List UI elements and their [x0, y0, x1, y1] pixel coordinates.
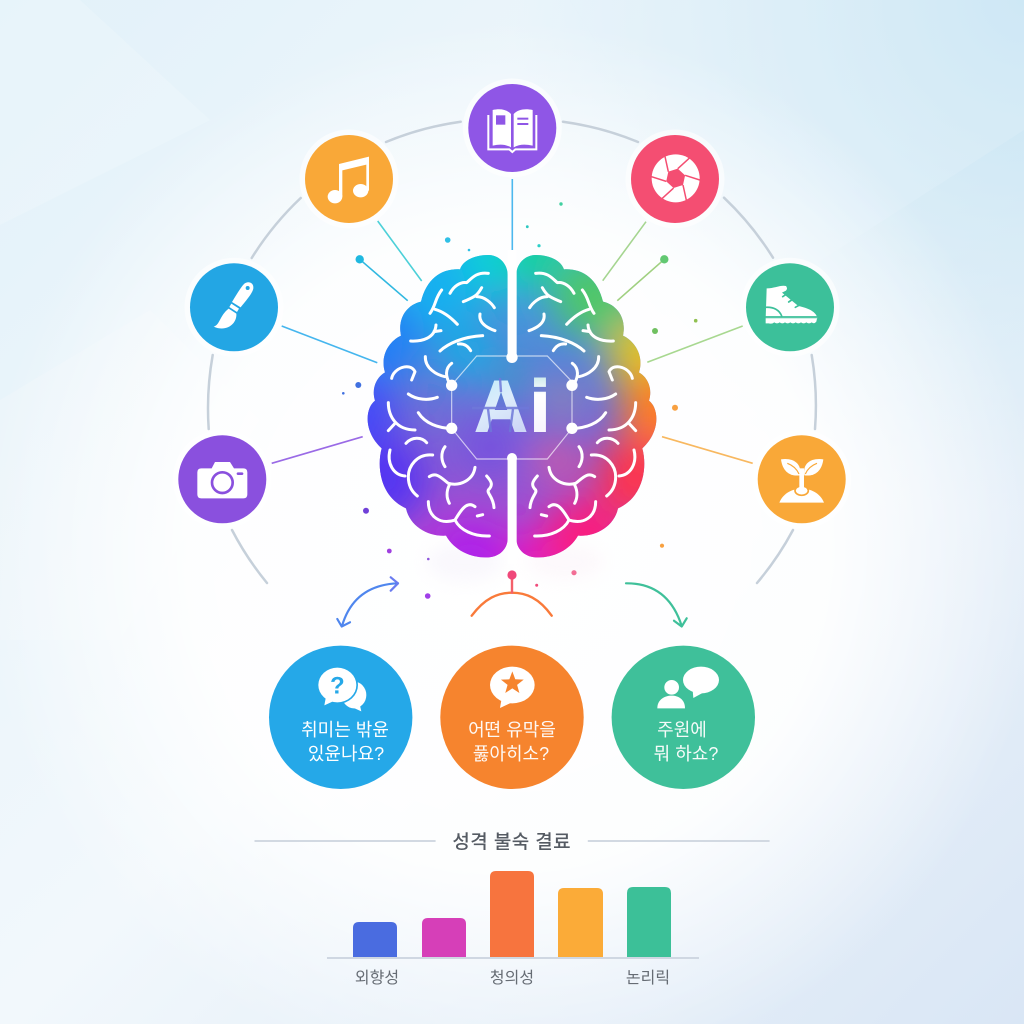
axis labels: 청의성 [490, 969, 534, 987]
icon: question speech bubbles [317, 666, 366, 711]
bar chart [327, 871, 699, 987]
brain illustration [368, 250, 656, 558]
icon: camera [173, 430, 272, 529]
connector lines from icons to brain [272, 179, 753, 463]
chip nodes [446, 352, 578, 463]
icon: person with speech bubble [657, 667, 719, 708]
question text [301, 720, 389, 764]
floating particles [342, 202, 698, 599]
question text: 뭐 하쇼? [654, 744, 718, 764]
right hemisphere folds [529, 273, 636, 536]
icon: question speech bubbles: ? [330, 673, 345, 700]
question card: weekend [612, 646, 755, 789]
icon: star speech bubble [490, 667, 535, 708]
arrow: green curve [626, 583, 687, 626]
Ai label: A [474, 367, 528, 447]
Ai label [472, 367, 550, 447]
central chip octagon [452, 356, 572, 459]
icon: open book [463, 78, 562, 178]
question card: music taste [440, 646, 584, 789]
question text: 있윤나요? [308, 744, 384, 764]
icon: paint brush [184, 258, 284, 357]
chart heading: 성격 불숙 결료 [452, 831, 571, 853]
icon: camera aperture [626, 130, 724, 228]
ring of arc segments [208, 122, 816, 583]
midline top [508, 250, 517, 357]
axis labels: 논리릭 [626, 969, 670, 987]
arrow: orange arch with node [472, 570, 552, 616]
question text: 어뗜 유막을 [468, 720, 556, 740]
icon: music note [300, 130, 398, 228]
icon: sprout [752, 430, 851, 529]
question text: 풇아히소? [473, 744, 549, 764]
axis labels [355, 969, 670, 987]
question text: 주원에 [657, 720, 707, 740]
question text [654, 720, 718, 764]
question card: hobbies [269, 646, 412, 789]
icon: hiking boot [740, 258, 840, 357]
Ai label: i [530, 367, 550, 447]
question text [468, 720, 556, 764]
left hemisphere folds [388, 273, 495, 536]
midline bottom [508, 457, 517, 564]
brain colour field [368, 255, 656, 558]
bars [353, 871, 671, 958]
question text: 취미는 밖윤 [301, 720, 389, 740]
arrow: blue double-headed curve [337, 577, 398, 626]
soft shadow below brain [427, 542, 603, 582]
axis labels: 외향성 [355, 969, 399, 987]
